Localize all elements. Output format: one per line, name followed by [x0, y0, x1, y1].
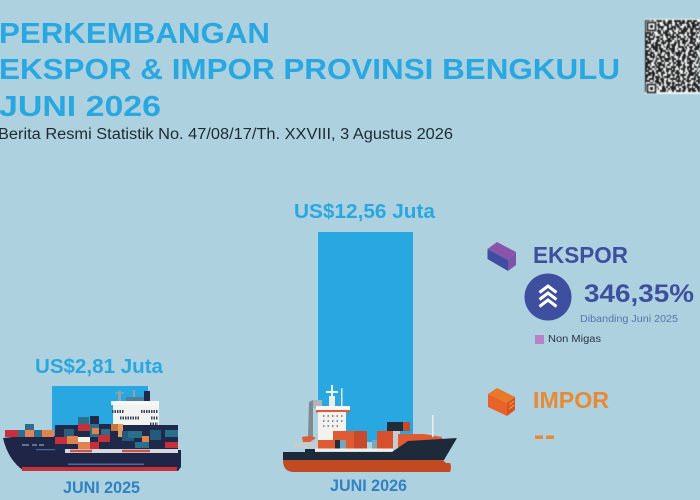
icon: up chevrons badge: [524, 274, 572, 320]
export growth value: 346,35%: [584, 280, 694, 308]
year label: Juni 2026: JUNI 2026: [330, 476, 407, 495]
subtitle: release reference: Berita Resmi Statistik No. 47/08/17/Th. XXVIII, 3 Agustus 2026: [0, 126, 453, 143]
containers: low bow stack: [5, 424, 54, 437]
import value: no data: [535, 436, 554, 439]
comparison note: Dibanding Juni 2025: [580, 314, 678, 325]
legend: non migas: Non Migas: [548, 333, 601, 345]
bar: Juni 2025: [52, 386, 148, 450]
QR code: [645, 19, 700, 94]
ship illustration: Juni 2025: [3, 390, 181, 471]
containers: main stacks: [55, 416, 178, 453]
title: [0, 18, 620, 123]
heading: Impor: IMPOR: [533, 387, 609, 413]
year label: Juni 2025: JUNI 2025: [63, 478, 140, 497]
value label: Juni 2025: US$2,81 Juta: [35, 356, 164, 378]
title: JUNI 2026: [0, 91, 161, 123]
value label: Juni 2026: US$12,56 Juta: [294, 201, 436, 223]
title: EKSPOR & IMPOR PROVINSI BENGKULU: [0, 54, 620, 86]
icon: export container: [488, 242, 516, 271]
bar: Juni 2026: [318, 232, 413, 442]
ship illustration: Juni 2026: [283, 385, 457, 472]
icon: import container: [488, 388, 515, 416]
heading: Ekspor: EKSPOR: [533, 242, 628, 268]
title: PERKEMBANGAN: [0, 18, 270, 50]
